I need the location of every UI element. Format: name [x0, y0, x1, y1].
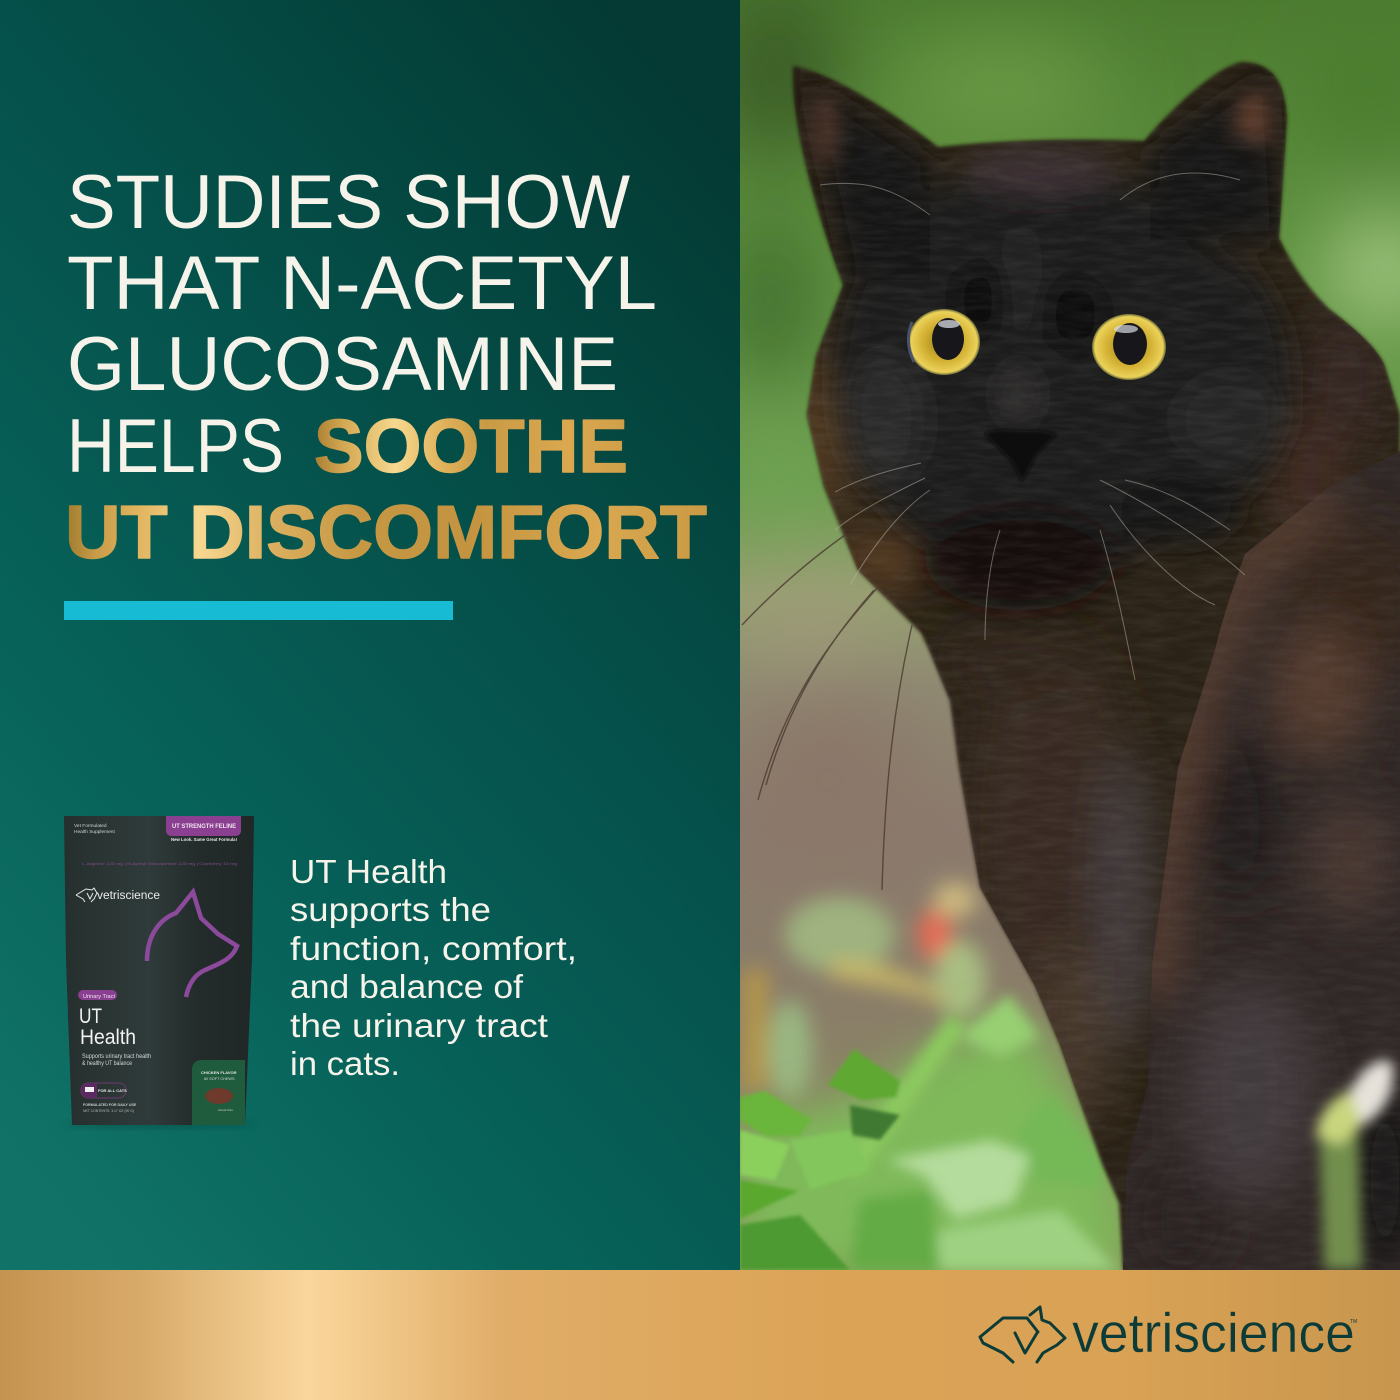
product bag: UT Health: L-Arginine 125 mg | N-Acetyl Glucosamine 125 mg | Cranberry 10 mg — [82, 861, 237, 866]
cat nose — [984, 430, 1057, 482]
eye: left — [908, 309, 980, 375]
product bag: UT Health: FORMULATED FOR DAILY USE — [83, 1103, 137, 1107]
heading: studies show N-acetyl glucosamine: GLUCOSAMINE — [67, 322, 618, 407]
product bag: UT Health: vetriscience — [97, 890, 160, 902]
plants — [740, 994, 1130, 1270]
heading: studies show N-acetyl glucosamine — [67, 160, 657, 489]
product bag: UT Health: Urinary Tract — [83, 994, 115, 1000]
text block: product description: the urinary tract — [290, 1007, 548, 1044]
text block: product description: in cats. — [290, 1045, 400, 1082]
eye: right — [1092, 314, 1166, 380]
heading: studies show N-acetyl glucosamine: HELPS — [67, 404, 284, 489]
product bag: UT Health: Health — [80, 1026, 136, 1049]
photo: black cat in garden — [715, 0, 1400, 1280]
logo: vetriscience: vetriscience — [1072, 1301, 1355, 1364]
heading: studies show N-acetyl glucosamine: STUDIES SHOW — [67, 160, 630, 245]
text block: product description: and balance of — [290, 968, 524, 1005]
product bag: UT Health: Health Supplement — [74, 829, 115, 835]
fur colour masses — [956, 657, 1126, 1006]
product bag: UT Health: FOR ALL CATS — [98, 1088, 127, 1093]
text block: product description: supports the — [290, 891, 491, 928]
product bag: UT Health: Actual Size — [218, 1108, 233, 1112]
product bag: UT Health: Supports urinary tract health — [82, 1054, 151, 1060]
whiskers — [742, 173, 1245, 890]
text block: product description: function, comfort, — [290, 930, 577, 967]
logo icon: cat and dog — [980, 1307, 1065, 1362]
heading: studies show N-acetyl glucosamine: THAT N-ACETYL — [67, 241, 657, 326]
logo: vetriscience: TM — [1350, 1319, 1357, 1325]
text block: product description: UT Health — [290, 853, 447, 890]
product bag: UT Health: UT STRENGTH FELINE — [172, 823, 236, 830]
product bag: UT Health: Vet Formulated — [74, 823, 107, 829]
text block: product description — [290, 853, 577, 1082]
cat: foreground back — [1120, 450, 1400, 1280]
product bag: UT Health: & healthy UT balance — [82, 1061, 133, 1067]
cat: main head and neck — [793, 60, 1400, 1270]
product bag: UT Health — [64, 816, 255, 1128]
heading: gold highlight soothe UT discomfort — [65, 404, 707, 574]
product bag: UT Health: New Look. Same Great Formula! — [171, 837, 237, 842]
product bag: UT Health: CHICKEN FLAVOR — [201, 1070, 237, 1075]
inner ears — [811, 90, 1272, 168]
divider: cyan accent bar — [64, 601, 453, 620]
heading: gold highlight soothe UT discomfort: UT DISCOMFORT — [65, 490, 707, 574]
blurred plant bud — [1315, 1060, 1393, 1270]
product bag: UT Health: 60 SOFT CHEWS — [204, 1077, 235, 1081]
panel: green gradient background — [0, 0, 740, 1270]
product bag: UT Health: NET CONTENTS: 3.17 OZ (90 G) — [83, 1109, 134, 1113]
product bag: UT Health: UT — [79, 1005, 102, 1028]
heading: gold highlight soothe UT discomfort: SOOTHE — [314, 404, 628, 488]
footer: gold band — [0, 1270, 1400, 1400]
